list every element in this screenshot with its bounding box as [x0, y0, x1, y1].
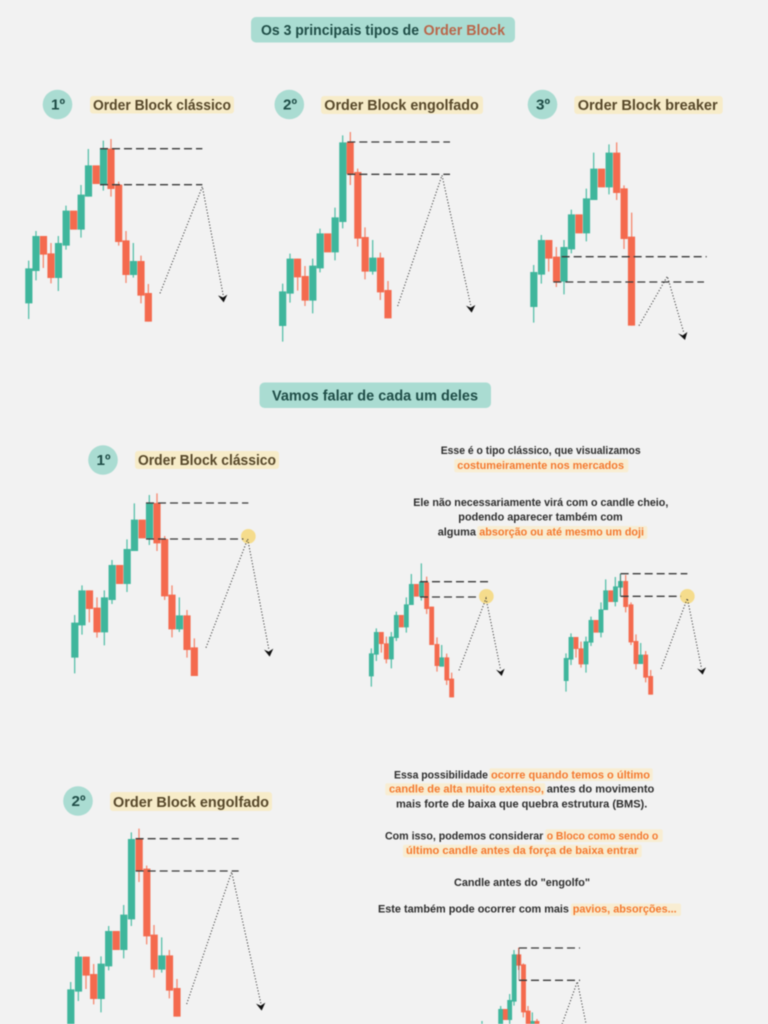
text block: engolfo: Candle antes do "engolfo": [454, 877, 590, 889]
text block: possibilidade: antes do movimento: [547, 784, 654, 796]
text block: bloco: [385, 829, 663, 857]
title: Order Block: [424, 22, 506, 39]
text block: tipo clássico: [441, 445, 641, 472]
badge: 3º: [528, 90, 557, 119]
text block: candle cheio: alguma: [438, 526, 477, 538]
chart: Order Block breaker overview: [534, 142, 707, 340]
badge: 2º: 2º: [283, 96, 297, 114]
text block: possibilidade: ocorre quando temos o último: [491, 769, 650, 781]
label: Order Block clássico: Order Block clássico: [93, 97, 231, 114]
text block: candle cheio: [413, 497, 668, 539]
text block: possibilidade: [385, 768, 654, 811]
badge: 2º: [274, 90, 304, 119]
text block: candle cheio: podendo aparecer também com: [458, 512, 623, 524]
label: Order Block engolfado section: Order Block engolfado: [113, 794, 269, 811]
text block: pavios: [378, 904, 681, 916]
text block: possibilidade: Essa possibilidade: [394, 769, 488, 781]
text block: possibilidade: mais forte de baixa que quebra estrutura (BMS).: [396, 799, 647, 811]
text block: bloco: Com isso, podemos considerar: [385, 830, 544, 842]
chart: Order Block engolfado overview: [283, 132, 475, 342]
label: Order Block breaker: Order Block breaker: [578, 97, 718, 114]
text block: tipo clássico: costumeiramente nos mercados: [457, 460, 624, 472]
title: Os 3 principais tipos de: [261, 22, 419, 39]
label: Order Block engolfado: Order Block engolfado: [324, 97, 479, 114]
text block: bloco: o Bloco como sendo o: [547, 830, 658, 842]
badge: 2º section: 2º: [72, 793, 86, 810]
badge: 1º section: [88, 445, 118, 475]
heading: Vamos falar de cada um deles: Vamos falar de cada um deles: [272, 388, 478, 404]
text block: pavios: Este também pode ocorrer com mais: [378, 904, 569, 916]
badge: 3º: 3º: [536, 96, 550, 114]
title: [251, 17, 515, 42]
chart: Order Block engolfado large: [71, 829, 265, 1024]
text block: tipo clássico: Esse é o tipo clássico, que visualizamos: [441, 445, 641, 457]
heading: Vamos falar de cada um deles: [260, 382, 491, 408]
badge: 1º: [43, 90, 72, 119]
chart: small engulfing example: [482, 948, 587, 1024]
text block: candle cheio: absorção ou até mesmo um doji: [479, 526, 644, 538]
chart: Order Block clássico overview: [29, 139, 227, 322]
badge: 2º section: [63, 786, 93, 816]
text block: pavios: pavios, absorções...: [573, 904, 677, 916]
label: Order Block clássico section: Order Block clássico: [138, 452, 276, 469]
text block: possibilidade: candle de alta muito extenso,: [389, 784, 544, 796]
chart: small example with doji: [566, 574, 706, 695]
chart: Order Block clássico large: [75, 493, 273, 676]
text block: candle cheio: Ele não necessariamente virá com o candle cheio,: [413, 497, 668, 509]
badge: 1º: 1º: [51, 96, 65, 114]
text block: bloco: último candle antes da força de baixa entrar: [406, 845, 639, 857]
chart: small example with absorption: [371, 563, 505, 697]
badge: 1º section: 1º: [96, 452, 111, 469]
